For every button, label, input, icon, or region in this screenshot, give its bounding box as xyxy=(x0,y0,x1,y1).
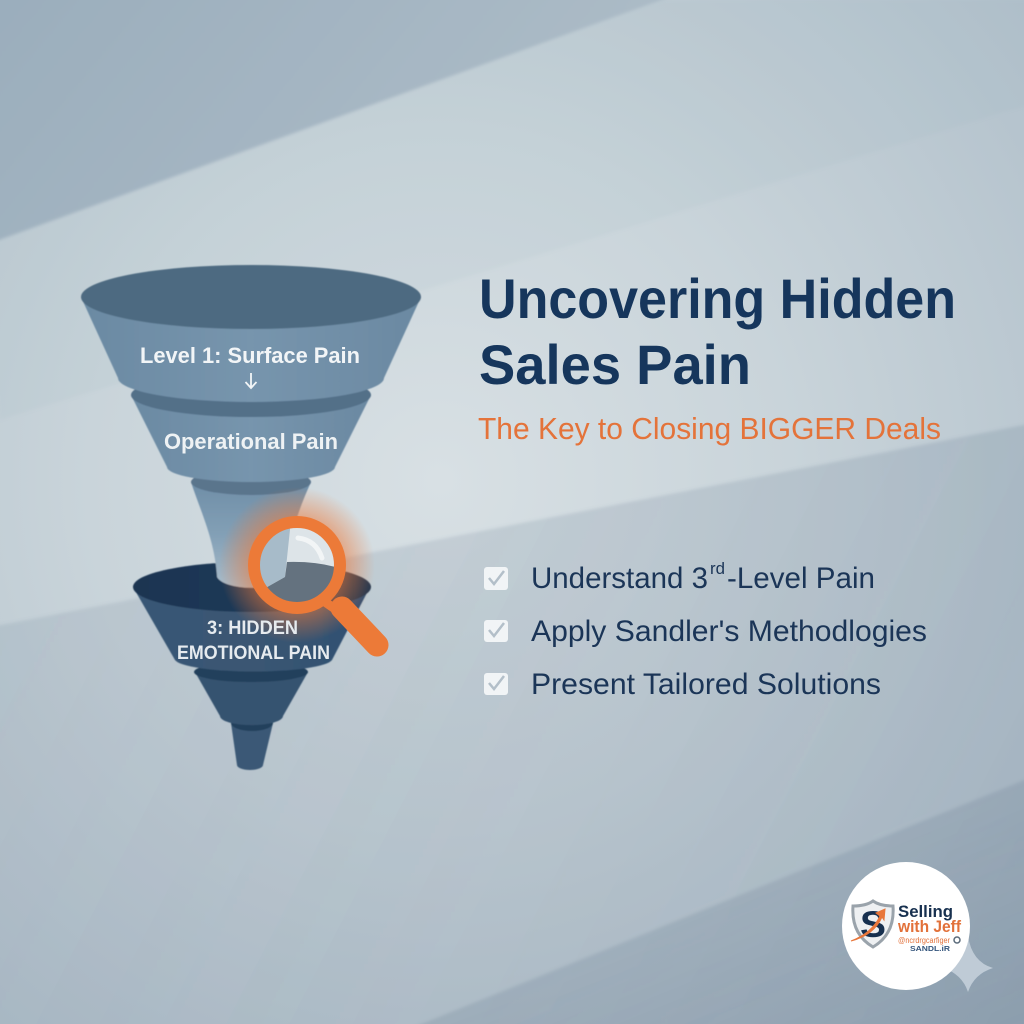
funnel tier: lower neck xyxy=(231,723,273,770)
label: emotional pain: EMOTIONAL PAIN xyxy=(177,643,330,664)
funnel tier: neck xyxy=(191,482,311,588)
item 1: rd xyxy=(710,559,725,578)
checklist xyxy=(484,559,927,701)
logo badge: SANDL.iR xyxy=(910,946,950,953)
funnel tier: level 1 surface pain xyxy=(81,297,421,402)
funnel illustration xyxy=(81,265,421,770)
label: operational pain: Operational Pain xyxy=(164,429,338,454)
magnifying glass xyxy=(250,520,377,645)
funnel tier: neck collar xyxy=(231,715,273,731)
funnel labels xyxy=(140,343,360,664)
logo badge: @ncrdrgcarfiger xyxy=(898,936,950,945)
logo wordmark: Selling xyxy=(898,902,953,921)
sparkle xyxy=(943,936,993,992)
item 1: Understand 3 xyxy=(531,562,708,595)
funnel tier: neck collar upper xyxy=(191,469,311,495)
logo badge xyxy=(842,862,970,990)
title xyxy=(479,267,956,396)
item 2: Apply Sandler's Methodlogies xyxy=(531,615,927,648)
funnel tier: lower cone xyxy=(195,672,308,725)
handle xyxy=(325,602,338,611)
magnifier glow xyxy=(219,487,375,643)
label: hidden: 3: HIDDEN xyxy=(207,618,298,639)
item 1: -Level Pain xyxy=(727,562,875,595)
label: arrow down xyxy=(246,373,256,388)
logo shield: S xyxy=(860,904,886,945)
funnel tier: lower collar xyxy=(194,662,308,682)
title: Uncovering Hidden xyxy=(479,267,956,330)
lens xyxy=(260,528,334,602)
item 3: Present Tailored Solutions xyxy=(531,668,881,701)
funnel top opening xyxy=(81,265,421,329)
subtitle: The Key to Closing BIGGER Deals xyxy=(478,411,941,446)
item 1 xyxy=(484,559,875,595)
funnel tier: dark opening xyxy=(133,562,371,612)
funnel tier: upper collar xyxy=(131,373,371,417)
funnel tier: operational pain xyxy=(131,395,371,482)
funnel tier: hidden emotional pain xyxy=(133,587,370,672)
logo badge: with Jeff xyxy=(897,917,961,936)
label: level 1: Level 1: Surface Pain xyxy=(140,343,360,368)
title: Sales Pain xyxy=(479,333,751,396)
